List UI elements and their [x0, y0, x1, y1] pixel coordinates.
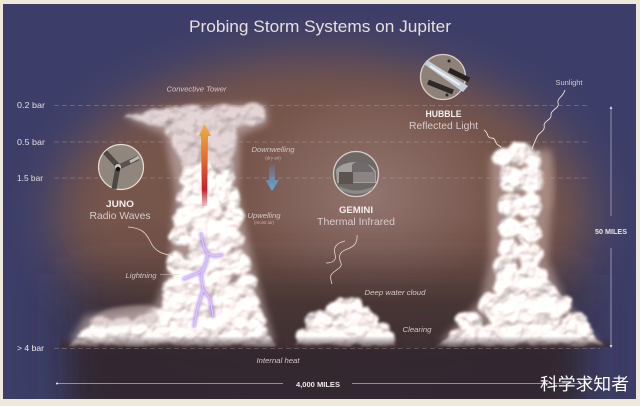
juno label: Radio Waves	[90, 210, 150, 222]
juno radio wave	[128, 227, 174, 256]
low haze on the left shoulder	[90, 305, 160, 327]
cloud body	[60, 104, 285, 347]
downwelling arrow	[266, 162, 279, 191]
hubble label	[409, 109, 478, 132]
annotation labels: (dry air)	[265, 156, 281, 160]
pressure labels: 0.2 bar	[17, 100, 45, 110]
base fade	[430, 336, 610, 347]
title: Probing Storm Systems on Jupiter	[189, 17, 451, 36]
annotation labels: (moist air)	[254, 220, 275, 225]
annotation labels	[126, 84, 432, 365]
lower tower	[68, 160, 276, 347]
lightning	[184, 234, 222, 326]
hubble icon	[420, 54, 469, 100]
gemini label	[317, 205, 395, 228]
convective tower cloud	[60, 104, 285, 347]
gemini icon	[334, 152, 378, 196]
annotation labels: Deep water cloud	[364, 288, 426, 297]
width scale: 4,000 miles: 4,000 MILES	[296, 380, 340, 389]
reflected and incoming light waves	[484, 90, 565, 149]
annotation labels: Upwelling	[248, 211, 281, 220]
juno label	[90, 199, 150, 222]
middle deep water cloud	[288, 297, 403, 348]
anvil and upper tower	[124, 104, 266, 178]
annotation labels: Convective Tower	[166, 84, 227, 94]
pressure labels: > 4 bar	[17, 343, 44, 353]
hubble label: Reflected Light	[409, 120, 478, 132]
gemini thermal waves	[326, 235, 357, 284]
lightning leader line	[160, 274, 180, 276]
annotation labels: Downwelling	[252, 145, 295, 154]
height scale: 50 miles	[595, 106, 627, 348]
hubble label: HUBBLE	[426, 109, 462, 119]
right storm cloud	[430, 141, 610, 347]
pressure labels: 0.5 bar	[17, 137, 45, 147]
base fade	[294, 336, 397, 347]
watermark: 科学求知者	[540, 370, 629, 395]
base fade	[60, 336, 285, 347]
annotation labels: Clearing	[402, 325, 432, 334]
upwelling leader line	[240, 215, 246, 217]
pressure level lines	[54, 106, 600, 348]
height scale: 50 miles: 50 MILES	[595, 229, 627, 236]
sunlight label: Sunlight	[556, 78, 583, 87]
gemini label: GEMINI	[339, 205, 373, 215]
pressure labels	[17, 100, 45, 353]
juno icon	[98, 144, 144, 190]
upward arrow	[199, 124, 211, 206]
annotation labels: Internal heat	[256, 356, 300, 365]
annotation labels: Lightning	[126, 271, 157, 280]
gemini label: Thermal Infrared	[317, 216, 395, 228]
juno label: JUNO	[106, 199, 134, 209]
pressure labels: 1.5 bar	[17, 173, 43, 183]
